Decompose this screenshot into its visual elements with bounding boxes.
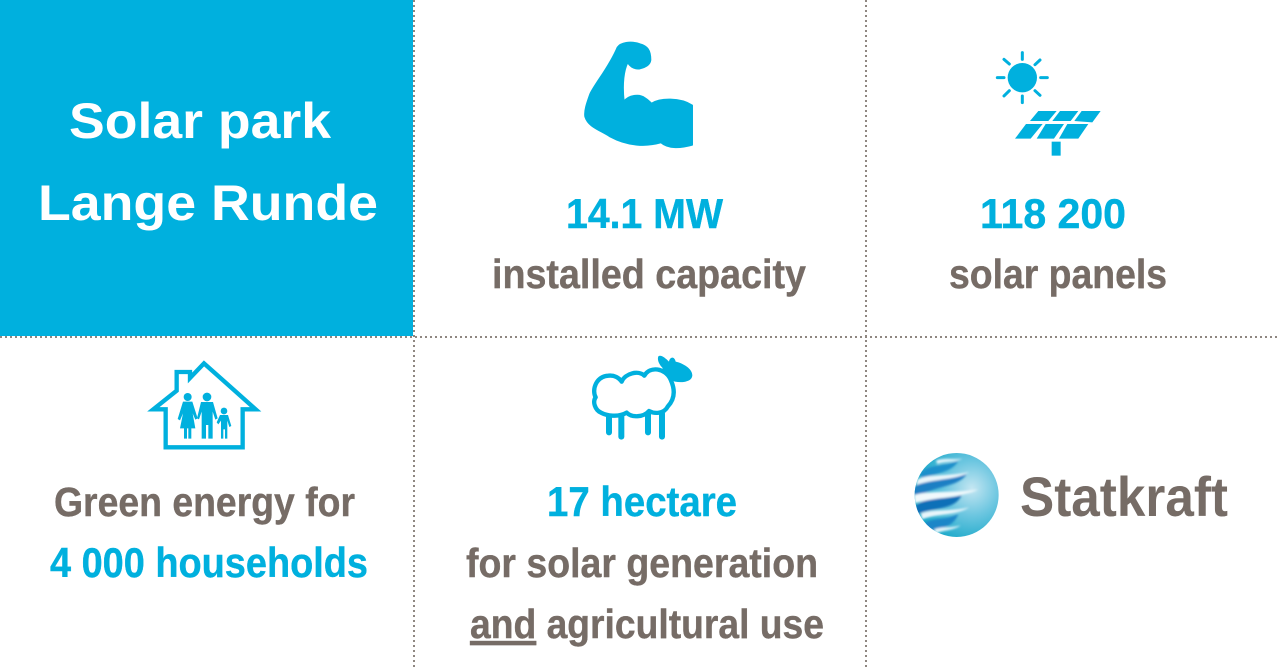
icon: family in house [153,363,256,447]
text: hectare use line 1: for solar generation [466,540,818,586]
panel: title block [0,0,413,336]
panel: households [50,363,368,586]
stat: capacity value: 14.1 MW [566,190,723,237]
text: Statkraft wordmark: Statkraft [1020,465,1228,528]
icon: flexed arm [585,42,692,147]
panel: hectares [466,356,824,647]
stat: panel count: 118 200 [980,190,1126,237]
stat: hectares: 17 hectare [547,478,737,525]
stat: households: 4 000 households [50,539,368,586]
icon: Statkraft globe [912,453,999,537]
text: capacity label: installed capacity [492,251,806,297]
panel: title block: Lange Runde [38,175,378,231]
text: green energy label: Green energy for [54,479,355,525]
text: hectare use line 2: and agricultural use [470,601,824,647]
text: panel label: solar panels [949,251,1167,297]
heading: title line 1: Solar park [69,93,331,149]
panel: installed capacity [492,42,806,297]
panel: solar panels [949,53,1167,297]
logo: Statkraft [912,453,1228,537]
icon: sheep [594,356,692,437]
icon: sun and solar panel [997,53,1101,156]
